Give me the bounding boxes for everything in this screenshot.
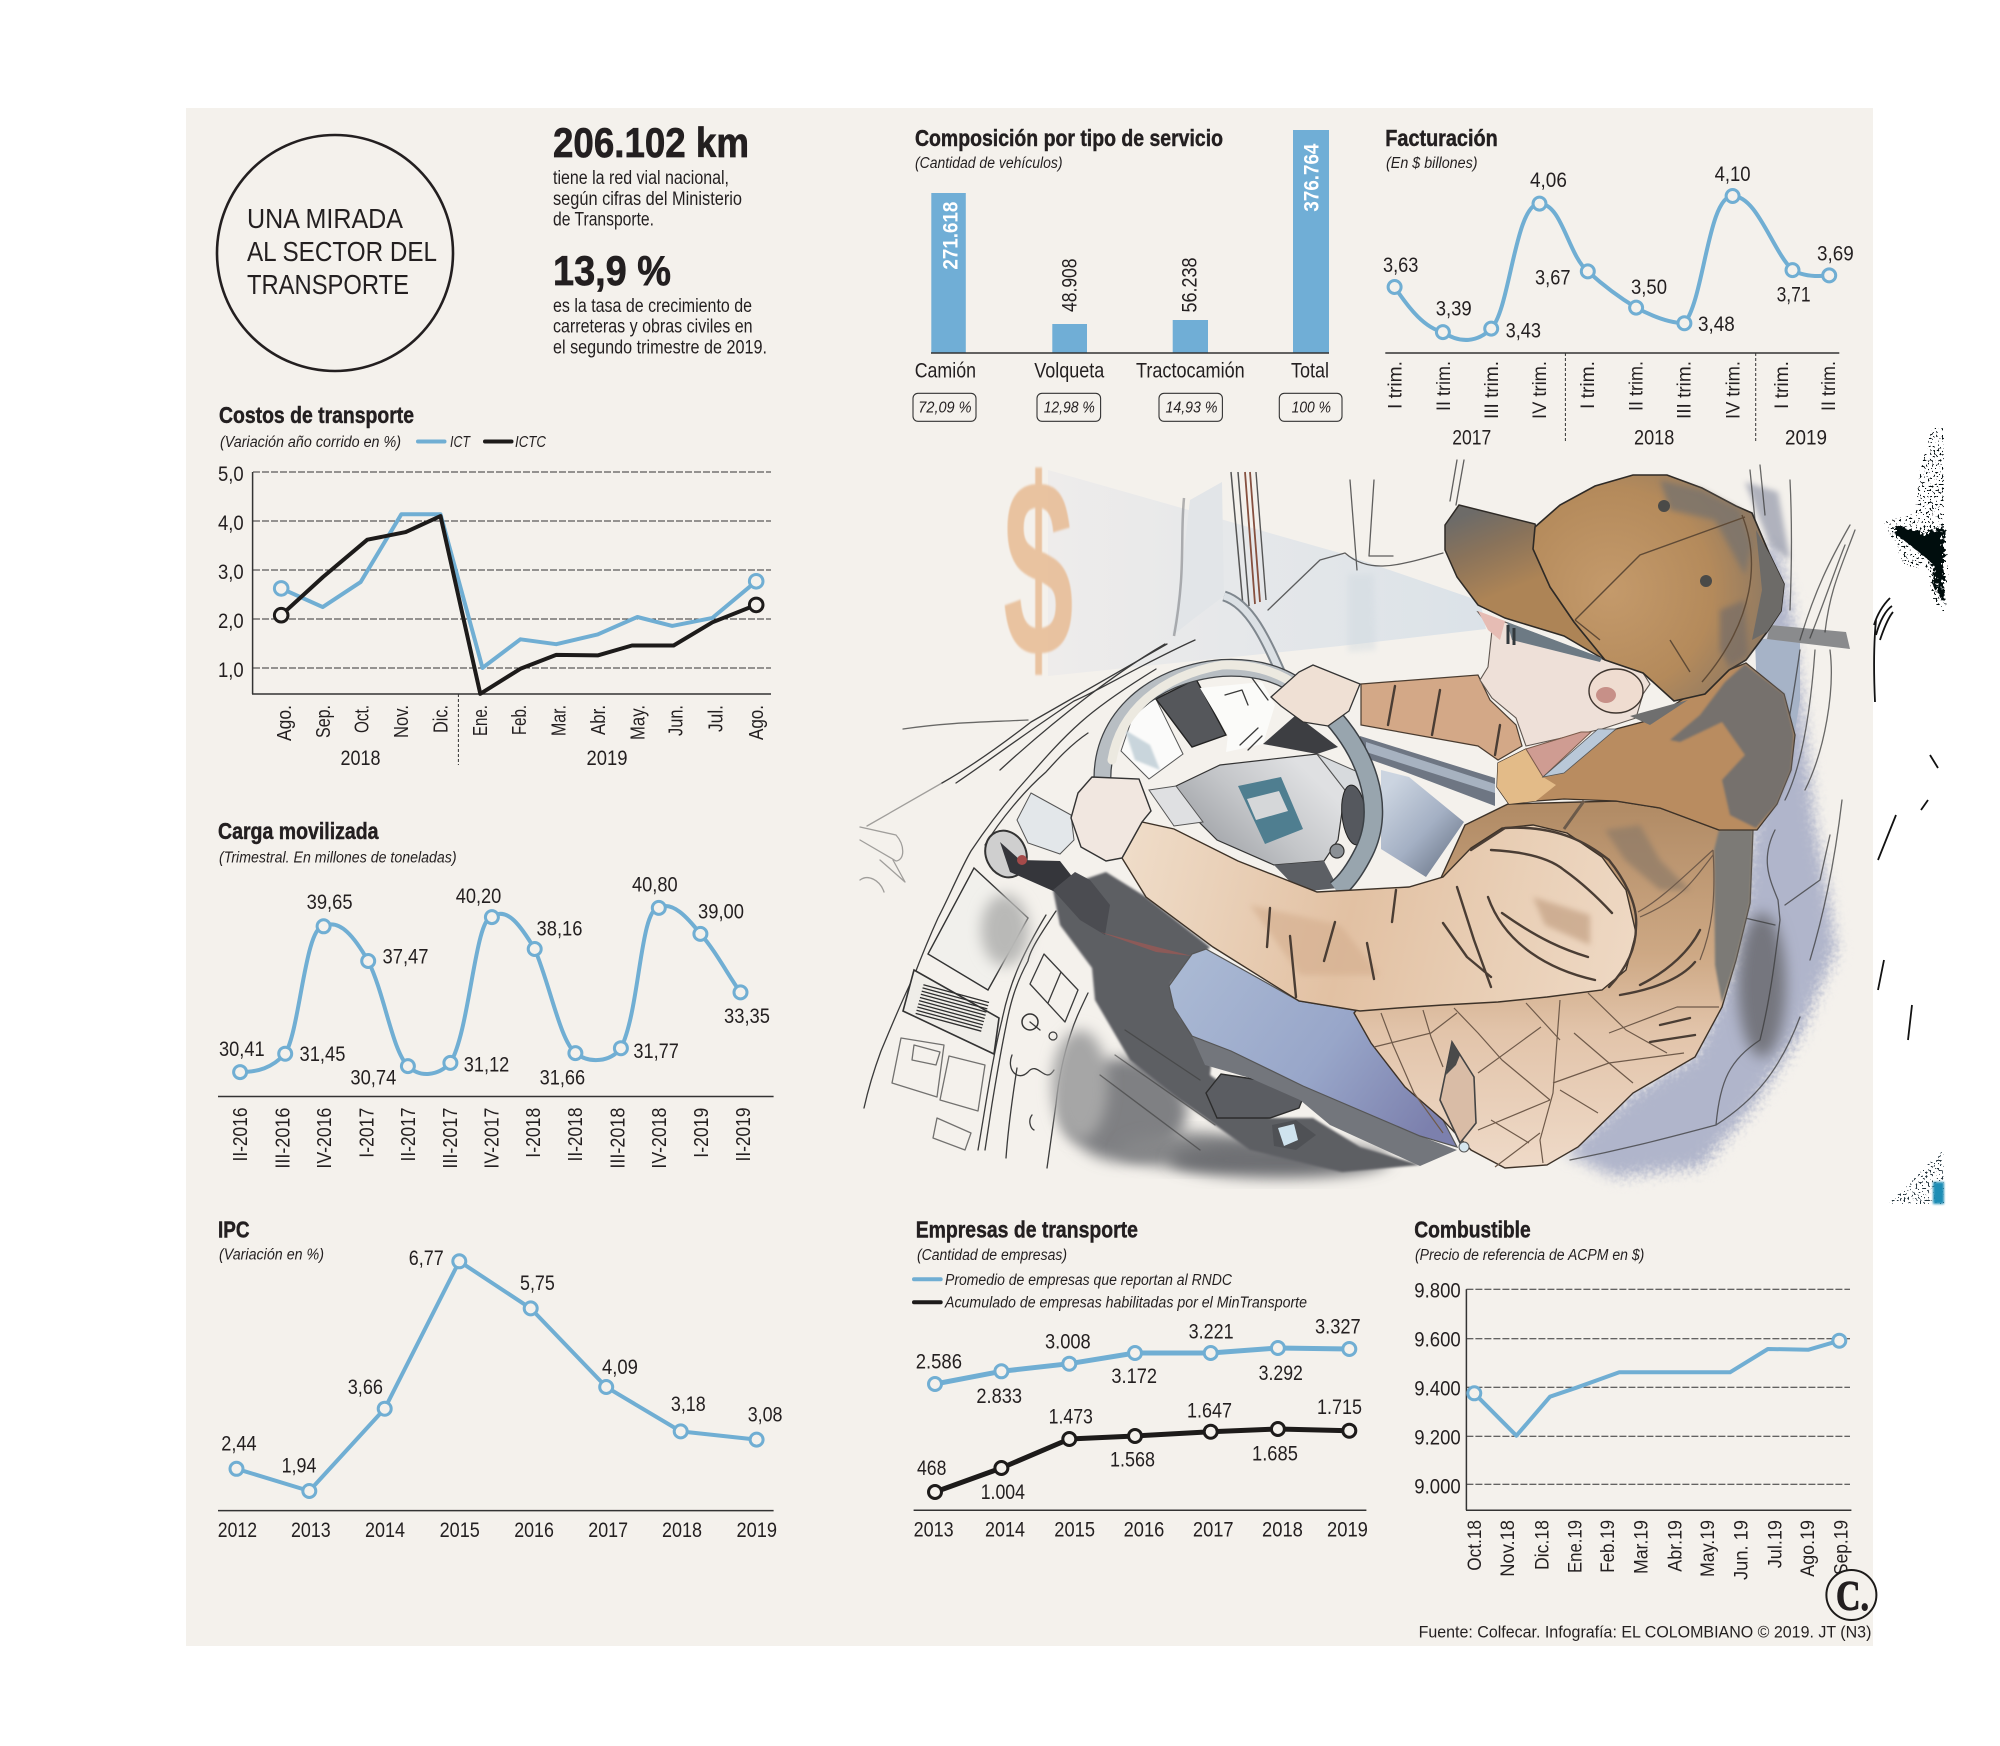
title text: AL SECTOR DEL (247, 236, 437, 267)
value labels: 3,66 (348, 1376, 383, 1399)
footwell shadow (1052, 872, 1420, 1178)
lower leg shadow (1192, 1036, 1457, 1166)
quarter labels: III trim. (1675, 361, 1696, 419)
bar values: 56.238 (1178, 258, 1202, 312)
x axis labels: Sep. (313, 705, 335, 738)
key figure: growth rate: carreteras y obras civiles en (553, 317, 753, 338)
speaker vent (903, 970, 999, 1054)
legend: ICTC (515, 434, 547, 451)
year labels (340, 747, 628, 770)
value labels: 31,66 (540, 1067, 585, 1090)
subtitle: (Cantidad de empresas) (917, 1247, 1067, 1264)
value labels: 1.685 (1252, 1442, 1298, 1465)
x axis labels: Feb. (509, 705, 531, 735)
shirt collar (1543, 729, 1616, 777)
value labels: 30,74 (350, 1067, 397, 1090)
quarter labels: III-2018 (607, 1108, 629, 1169)
value labels: 4,06 (1530, 169, 1567, 192)
legend: Promedio de empresas que reportan al RNDC (945, 1272, 1233, 1289)
source credit: Fuente: Colfecar. Infografía: EL COLOMBIANO © 2019. JT (N3) (1419, 1622, 1871, 1641)
value labels: 39,65 (307, 891, 353, 914)
subtitle: (En $ billones) (1386, 155, 1478, 172)
key figure: road network (553, 119, 749, 230)
value labels: 1.647 (1187, 1400, 1232, 1423)
near arm sleeve (1122, 822, 1636, 1011)
subtitle: (Trimestral. En millones de toneladas) (219, 849, 457, 866)
RNDC line (928, 1342, 1356, 1390)
x axis labels (274, 705, 768, 741)
value labels: 6,77 (409, 1247, 444, 1270)
jacket torso (1354, 801, 1753, 1168)
value labels: 40,80 (632, 874, 678, 897)
blue grey wash behind seat (1564, 482, 1836, 1177)
x axis labels: Ago. (746, 705, 768, 740)
value labels: 40,20 (456, 885, 501, 908)
quarter labels: IV-2018 (649, 1108, 671, 1169)
MinTransporte line (928, 1422, 1356, 1498)
month labels: Oct.18 (1465, 1520, 1486, 1571)
bar values: 376.764 (1300, 143, 1324, 212)
bar values: 48.908 (1058, 258, 1082, 312)
quarter labels: II-2018 (565, 1108, 587, 1162)
year labels: 2019 (1785, 427, 1827, 450)
quarter labels: II trim. (1626, 361, 1647, 411)
subtitle: (Cantidad de vehículos) (915, 155, 1062, 172)
x axis labels: Jun. (666, 705, 688, 736)
ICTC line (274, 516, 763, 694)
bar values: 271.618 (940, 201, 962, 270)
steering wheel (1102, 665, 1373, 892)
value labels: 2.586 (916, 1351, 962, 1374)
far hand (1271, 665, 1360, 726)
y axis labels: 3,0 (218, 561, 244, 584)
quarter labels: IV-2017 (481, 1108, 503, 1169)
x axis labels: Jul. (706, 705, 728, 732)
percentage pills (913, 393, 1342, 421)
neck and face (1478, 612, 1650, 746)
value labels: 3.008 (1045, 1331, 1091, 1354)
year labels: 2016 (1124, 1519, 1164, 1542)
percentage pills: 12,98 % (1044, 400, 1095, 416)
value labels: 1.568 (1110, 1449, 1155, 1472)
heading: Carga movilizada (218, 818, 379, 844)
pedal (1272, 1120, 1316, 1150)
month labels: Ago.19 (1798, 1520, 1819, 1577)
dashboard sketch lines (860, 640, 1195, 1168)
year labels: 2016 (514, 1519, 554, 1542)
value labels (219, 874, 770, 1090)
value labels (916, 1315, 1362, 1504)
key figure: road network: de Transporte. (553, 210, 654, 230)
key figure: road network: 206.102 km (553, 119, 749, 166)
value labels: 3,63 (1383, 254, 1418, 277)
heading: Empresas de transporte (916, 1216, 1138, 1242)
year labels (1452, 427, 1827, 450)
quarter labels: II-2016 (230, 1108, 252, 1162)
x axis labels: Ago. (274, 705, 296, 741)
quarter labels (1386, 361, 1840, 419)
quarter labels: IV trim. (1724, 361, 1745, 419)
category labels: Camión (915, 360, 976, 383)
value labels: 3.327 (1315, 1315, 1361, 1338)
month labels: Jul.19 (1765, 1520, 1786, 1568)
y axis labels: 9.600 (1414, 1329, 1461, 1352)
chart: Combustible (1414, 1216, 1853, 1580)
year labels: 2015 (440, 1519, 480, 1542)
year labels: 2014 (365, 1519, 405, 1542)
value labels: 3,71 (1777, 283, 1811, 306)
subtitle: (Precio de referencia de ACPM en $) (1415, 1247, 1644, 1264)
value labels (1383, 163, 1854, 342)
chart: Empresas de transporte (914, 1216, 1368, 1542)
value labels: 3,67 (1535, 266, 1570, 289)
icon: El Colombiano logo: C. (1836, 1574, 1869, 1620)
y axis labels: 9.200 (1414, 1426, 1461, 1449)
quarter labels: I-2018 (523, 1108, 545, 1158)
bar: Camión (931, 193, 966, 353)
heading: IPC (218, 1216, 250, 1242)
y axis labels: 1,0 (218, 659, 244, 682)
key figure: growth rate: 13,9 % (553, 247, 671, 294)
dash screen (928, 868, 1028, 990)
y axis labels: 4,0 (218, 512, 244, 535)
month labels: Abr.19 (1665, 1520, 1686, 1572)
chart: Composición por tipo de servicio (913, 125, 1342, 421)
value labels: 3,08 (748, 1404, 782, 1427)
key figure: road network: tiene la red vial nacional, (553, 168, 729, 189)
year labels: 2019 (736, 1519, 777, 1542)
quarter labels: II trim. (1819, 361, 1840, 411)
year labels: 2017 (1193, 1519, 1234, 1542)
category labels (915, 360, 1329, 383)
x axis labels: Oct. (352, 705, 374, 733)
sunglasses (1507, 622, 1602, 662)
chart: Costos de transporte (218, 402, 771, 770)
far sleeve (1361, 675, 1522, 760)
legend: Acumulado de empresas habilitadas por el MinTransporte (944, 1294, 1307, 1311)
year labels: 2017 (588, 1519, 628, 1542)
value labels: 3,43 (1506, 320, 1541, 342)
icon: dollar sign: $ (1003, 426, 1074, 710)
value labels: 31,77 (633, 1040, 679, 1063)
quarter labels: II-2017 (398, 1108, 420, 1162)
year labels: 2018 (1634, 427, 1674, 450)
percentage pills: 14,93 % (1166, 400, 1218, 416)
year labels: 2019 (586, 747, 628, 770)
near hand (1071, 777, 1151, 861)
quarter labels: III-2017 (440, 1108, 462, 1169)
y axis labels (1414, 1279, 1461, 1498)
bar: Total (1293, 130, 1329, 353)
y axis labels: 9.000 (1414, 1476, 1461, 1498)
value labels: 38,16 (536, 918, 582, 940)
heading: Composición por tipo de servicio (915, 125, 1223, 151)
year labels: 2018 (662, 1519, 702, 1542)
heading: Combustible (1414, 1216, 1531, 1242)
category labels: Total (1291, 360, 1329, 383)
category labels: Volqueta (1034, 360, 1105, 383)
year labels: 2018 (1262, 1519, 1303, 1542)
x axis labels: Ene. (470, 705, 492, 736)
x axis labels: Abr. (588, 705, 610, 735)
hair behind ear (1630, 700, 1688, 725)
x axis labels: Dic. (431, 705, 453, 733)
quarter labels: I trim. (1386, 361, 1407, 409)
quilting on jacket (1374, 850, 1719, 1167)
month labels: May.19 (1698, 1520, 1719, 1577)
bar values (940, 143, 1324, 312)
value labels: 33,35 (724, 1005, 770, 1028)
value labels: 5,75 (520, 1272, 555, 1295)
legend: ICT (450, 434, 471, 451)
value labels: 468 (917, 1457, 946, 1480)
year labels (218, 1519, 777, 1542)
heading: Costos de transporte (219, 402, 414, 428)
quarter labels (230, 1108, 755, 1169)
y axis labels: 9.400 (1414, 1377, 1461, 1400)
x axis labels: Nov. (391, 705, 413, 738)
jeans thigh (1169, 949, 1457, 1147)
month labels: Jun. 19 (1732, 1520, 1753, 1580)
year labels: 2012 (218, 1519, 257, 1542)
quarter labels: I-2019 (691, 1108, 713, 1158)
category labels: Tractocamión (1136, 360, 1245, 383)
subtitle: (Variación año corrido en %) (220, 434, 401, 451)
y axis labels: 5,0 (218, 463, 244, 486)
x axis labels: May. (628, 705, 650, 740)
value labels: 3.172 (1111, 1365, 1157, 1388)
month labels: Dic.18 (1532, 1520, 1553, 1570)
windshield pillar and cab lines (1000, 460, 1464, 770)
ICT line (274, 514, 763, 668)
value labels: 1.004 (981, 1481, 1025, 1504)
value labels: 2.833 (976, 1385, 1022, 1408)
value labels: 3,18 (671, 1393, 706, 1416)
year labels (914, 1519, 1368, 1542)
value labels: 1.473 (1049, 1405, 1093, 1428)
line with markers (234, 901, 747, 1079)
month labels: Ene.19 (1565, 1520, 1586, 1573)
value labels: 31,45 (300, 1043, 345, 1066)
value labels: 1,94 (282, 1455, 317, 1478)
door bar (1360, 736, 1495, 806)
torso smudge (1605, 825, 1690, 890)
value labels: 3,69 (1817, 243, 1854, 266)
legend (418, 434, 547, 451)
scanned speckle artefacts at right margin (1874, 428, 1944, 1204)
year labels: 2014 (985, 1519, 1025, 1542)
legend (914, 1272, 1307, 1311)
month labels: Nov.18 (1498, 1520, 1519, 1577)
month labels: Mar.19 (1632, 1520, 1653, 1574)
percentage pills: 72,09 % (918, 400, 972, 416)
chart: Facturación (1383, 125, 1854, 450)
key figure: growth rate: es la tasa de crecimiento de (553, 296, 752, 317)
price line (1468, 1334, 1846, 1436)
quarter labels: IV-2016 (314, 1108, 336, 1169)
key figure: road network: según cifras del Ministerio (553, 189, 742, 210)
month labels: Feb.19 (1598, 1520, 1619, 1573)
value labels: 31,12 (464, 1054, 509, 1076)
chart: Carga movilizada (218, 818, 774, 1169)
key figure: growth rate (553, 247, 767, 359)
light cone from the driver's eyes (1048, 470, 1486, 676)
title text: UNA MIRADA (247, 203, 403, 234)
key figure: growth rate: el segundo trimestre de 2019. (553, 338, 767, 359)
percentage pills: 100 % (1292, 400, 1331, 416)
year labels: 2018 (340, 747, 380, 770)
boot (1206, 1074, 1306, 1118)
year labels: 2017 (1452, 427, 1491, 450)
title text: TRANSPORTE (247, 269, 409, 300)
heading: Facturación (1385, 125, 1498, 151)
value labels: 30,41 (219, 1038, 265, 1061)
y axis labels (218, 463, 244, 682)
hat crown (1533, 475, 1784, 701)
value labels: 39,00 (698, 901, 744, 924)
y axis labels: 2,0 (218, 610, 244, 633)
year labels: 2013 (914, 1519, 954, 1542)
hat brim (1445, 505, 1605, 660)
window reflections (1348, 574, 1376, 652)
panel: beige infographic background (186, 108, 1873, 1646)
subtitle: (Variación en %) (219, 1247, 324, 1264)
bar: Tractocamión (1173, 320, 1208, 353)
value labels (221, 1247, 783, 1478)
scarf (1526, 732, 1591, 777)
value labels: 3,48 (1698, 313, 1735, 336)
month labels: Sep.19 (1832, 1520, 1853, 1575)
nose tint (1478, 611, 1505, 640)
far knee (1381, 770, 1464, 877)
value labels: 2,44 (221, 1432, 257, 1455)
ear (1589, 669, 1643, 713)
year labels: 2013 (291, 1519, 331, 1542)
icon: truck logo on wheel (1238, 777, 1303, 844)
y axis labels: 9.800 (1414, 1279, 1461, 1302)
value labels: 3.221 (1189, 1321, 1234, 1344)
seat, strap and curtain sketch (1570, 465, 1855, 1160)
gear stick (978, 793, 1192, 956)
value labels: 37,47 (382, 946, 428, 969)
quarter labels: I-2017 (356, 1108, 378, 1158)
quarter labels: II-2019 (733, 1108, 755, 1162)
quarter labels: IV trim. (1530, 361, 1551, 419)
title text (247, 203, 437, 300)
bar: Volqueta (1052, 324, 1087, 353)
value labels: 3.292 (1259, 1362, 1303, 1385)
value labels: 4,10 (1715, 163, 1751, 186)
title circle (217, 135, 453, 371)
value labels: 3,39 (1436, 298, 1472, 321)
year labels: 2015 (1054, 1519, 1095, 1542)
quarter labels: II trim. (1434, 361, 1455, 411)
quarter labels: III trim. (1482, 361, 1503, 419)
quarter labels: I trim. (1772, 361, 1793, 409)
line with markers (230, 1255, 763, 1498)
month labels (1465, 1520, 1853, 1580)
value labels: 4,09 (602, 1356, 638, 1379)
jacket pocket (1440, 1042, 1476, 1152)
torso side shadow (1714, 828, 1753, 1003)
chart: IPC (218, 1216, 783, 1542)
x axis labels: Mar. (548, 705, 570, 736)
sleeve folds and shading (1250, 801, 1636, 997)
line with markers (1388, 190, 1836, 340)
quarter labels: III-2016 (272, 1108, 294, 1169)
value labels: 3,50 (1631, 276, 1667, 299)
value labels: 1.715 (1317, 1396, 1362, 1419)
year labels: 2019 (1327, 1519, 1368, 1542)
illustration: truck driver in cab (860, 426, 1855, 1178)
jacket hood and collar (1497, 663, 1795, 830)
quarter labels: I trim. (1578, 361, 1599, 409)
